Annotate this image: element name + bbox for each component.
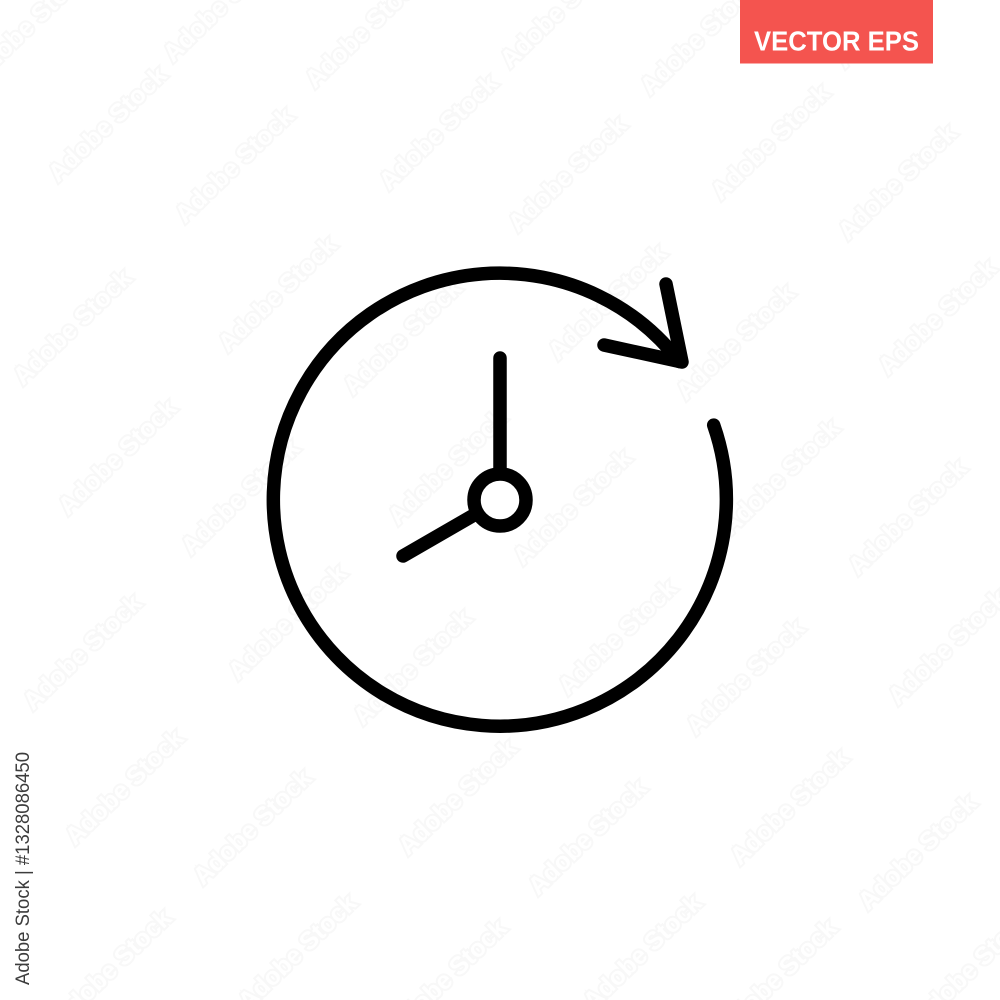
watermark pattern: Adobe Stock <box>393 734 522 860</box>
watermark pattern: Adobe Stock <box>60 724 189 850</box>
watermark pattern: Adobe Stock <box>681 614 810 740</box>
watermark pattern: Adobe Stock <box>43 61 172 187</box>
watermark pattern: Adobe Stock <box>223 559 352 685</box>
stock id vertical text: Adobe Stock | #1328086450 <box>13 752 34 985</box>
watermark pattern: Adobe Stock <box>188 764 317 890</box>
watermark pattern: Adobe Stock <box>553 574 682 700</box>
badge: vector eps <box>740 0 933 64</box>
watermark pattern: Adobe Stock <box>706 79 835 205</box>
watermark pattern: Adobe Stock <box>843 454 972 580</box>
watermark pattern: Adobe Stock <box>503 111 632 237</box>
watermark pattern: Adobe Stock <box>374 69 503 195</box>
watermark pattern: Adobe Stock <box>18 589 147 715</box>
watermark pattern: Adobe Stock <box>176 434 305 560</box>
watermark pattern: Adobe Stock <box>523 774 652 900</box>
hour hand <box>403 515 474 556</box>
clock hub ring <box>474 474 526 526</box>
minute hand <box>493 358 507 470</box>
watermark pattern: Adobe Stock <box>348 604 477 730</box>
watermark pattern: Adobe Stock <box>508 444 637 570</box>
badge label: VECTOR EPS <box>754 26 919 56</box>
watermark pattern: Adobe Stock <box>383 404 512 530</box>
watermark pattern: Adobe Stock <box>671 279 800 405</box>
watermark pattern: Adobe Stock <box>213 231 342 357</box>
watermark pattern: Adobe Stock <box>853 789 982 915</box>
watermark pattern: Adobe Stock <box>8 264 137 390</box>
watermark pattern: Adobe Stock <box>53 394 182 520</box>
icon: clock with clockwise arrow <box>273 273 726 726</box>
watermark pattern: Adobe Stock <box>725 744 854 870</box>
watermark pattern: Adobe Stock <box>833 119 962 245</box>
watermark pattern: Adobe Stock <box>170 102 299 228</box>
watermark pattern: Adobe Stock <box>543 239 672 365</box>
watermark pattern: Adobe Stock <box>338 274 467 400</box>
circular arrow arc <box>273 273 726 726</box>
arrowhead <box>604 284 682 362</box>
watermark pattern: Adobe Stock <box>716 414 845 540</box>
watermark pattern: Adobe Stock <box>873 254 1000 380</box>
